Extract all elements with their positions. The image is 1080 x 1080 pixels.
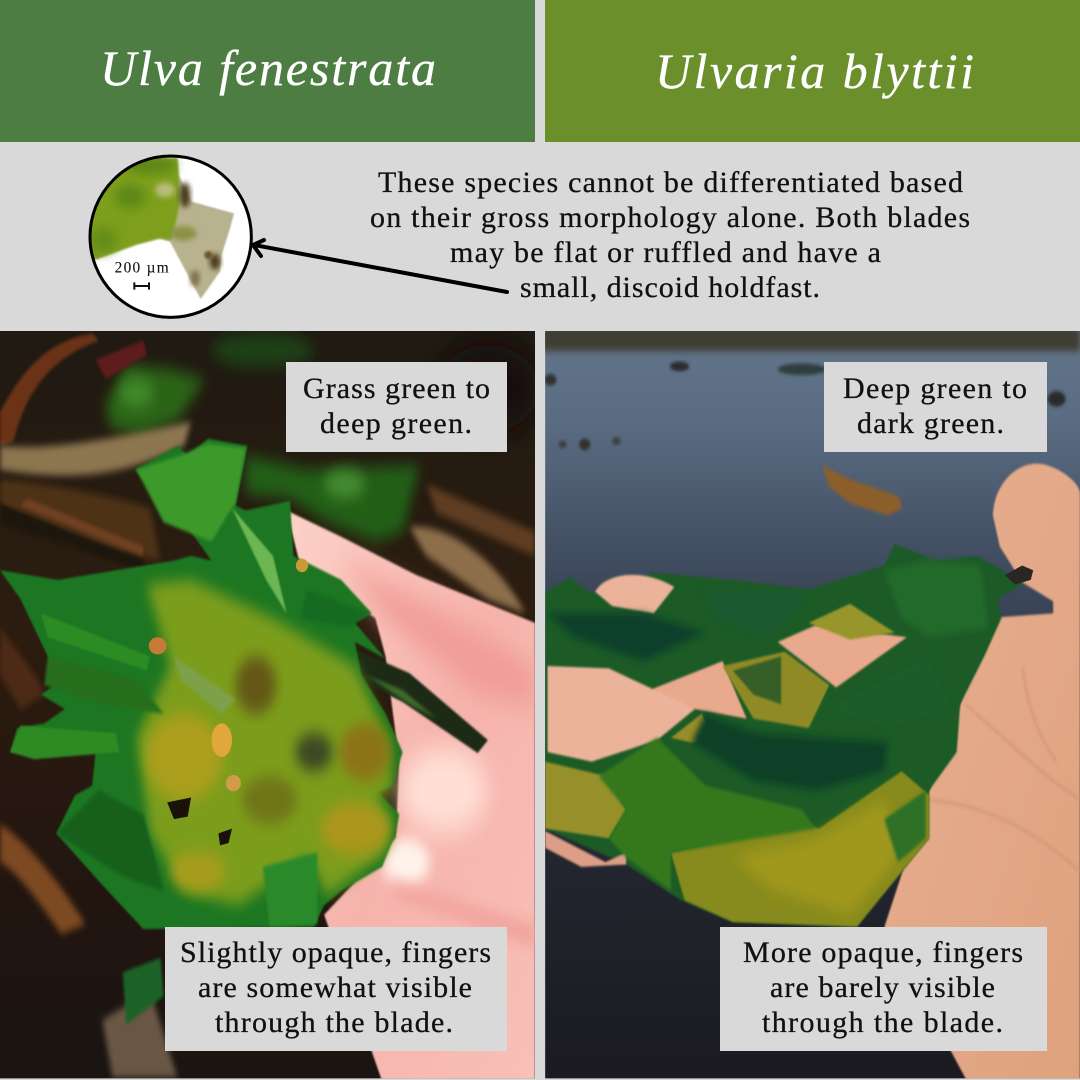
intro text block	[370, 166, 970, 304]
background kelp and greenery	[0, 333, 539, 1077]
right photo: Ulvaria blyttii in hand	[540, 326, 1080, 1080]
micrograph circle with scale bar	[88, 156, 251, 317]
arrow from text to micrograph	[253, 240, 507, 292]
label: opacity, Ulvaria: are barely visible	[770, 971, 995, 1004]
left photo: Ulva fenestrata in hand	[0, 331, 539, 1080]
hand	[287, 510, 535, 1080]
label: colour, Ulvaria	[824, 362, 1047, 452]
header: Ulva fenestrata	[0, 0, 535, 142]
hand	[884, 464, 1080, 1080]
label: opacity, Ulva	[165, 927, 507, 1051]
scale label: 200 µm	[115, 259, 169, 276]
label: colour, Ulva: Grass green to	[303, 372, 490, 405]
intro text block: These species cannot be differentiated based	[378, 166, 963, 199]
label: opacity, Ulvaria	[720, 927, 1047, 1051]
blade silhouette	[545, 544, 1022, 927]
label: colour, Ulvaria: dark green.	[857, 407, 1004, 440]
header: Ulvaria blyttii: Ulvaria blyttii	[655, 43, 974, 99]
label: colour, Ulva	[286, 362, 507, 452]
header: Ulvaria blyttii	[545, 0, 1080, 142]
floating brown blade	[822, 465, 902, 515]
scale bar	[134, 282, 149, 290]
finger gap	[355, 649, 488, 753]
distant shore and debris	[540, 326, 1080, 515]
palm creases	[929, 666, 1080, 872]
label: opacity, Ulva: are somewhat visible	[198, 971, 472, 1004]
intro text block: small, discoid holdfast.	[520, 271, 820, 304]
label: colour, Ulva: deep green.	[320, 407, 472, 440]
green folds	[547, 561, 988, 891]
fingers seen through gaps	[545, 575, 909, 867]
label: opacity, Ulva: through the blade.	[215, 1006, 453, 1039]
label: opacity, Ulvaria: More opaque, fingers	[743, 936, 1023, 969]
intro text block: on their gross morphology alone. Both blades	[370, 201, 970, 234]
blade	[0, 439, 403, 929]
olive translucent blade	[545, 604, 929, 927]
holdfast	[1005, 565, 1033, 585]
header: Ulva fenestrata: Ulva fenestrata	[100, 40, 436, 96]
intro text block: may be flat or ruffled and have a	[450, 236, 881, 269]
label: colour, Ulvaria: Deep green to	[843, 372, 1027, 405]
label: opacity, Ulva: Slightly opaque, fingers	[180, 936, 491, 969]
label: opacity, Ulvaria: through the blade.	[762, 1006, 1003, 1039]
